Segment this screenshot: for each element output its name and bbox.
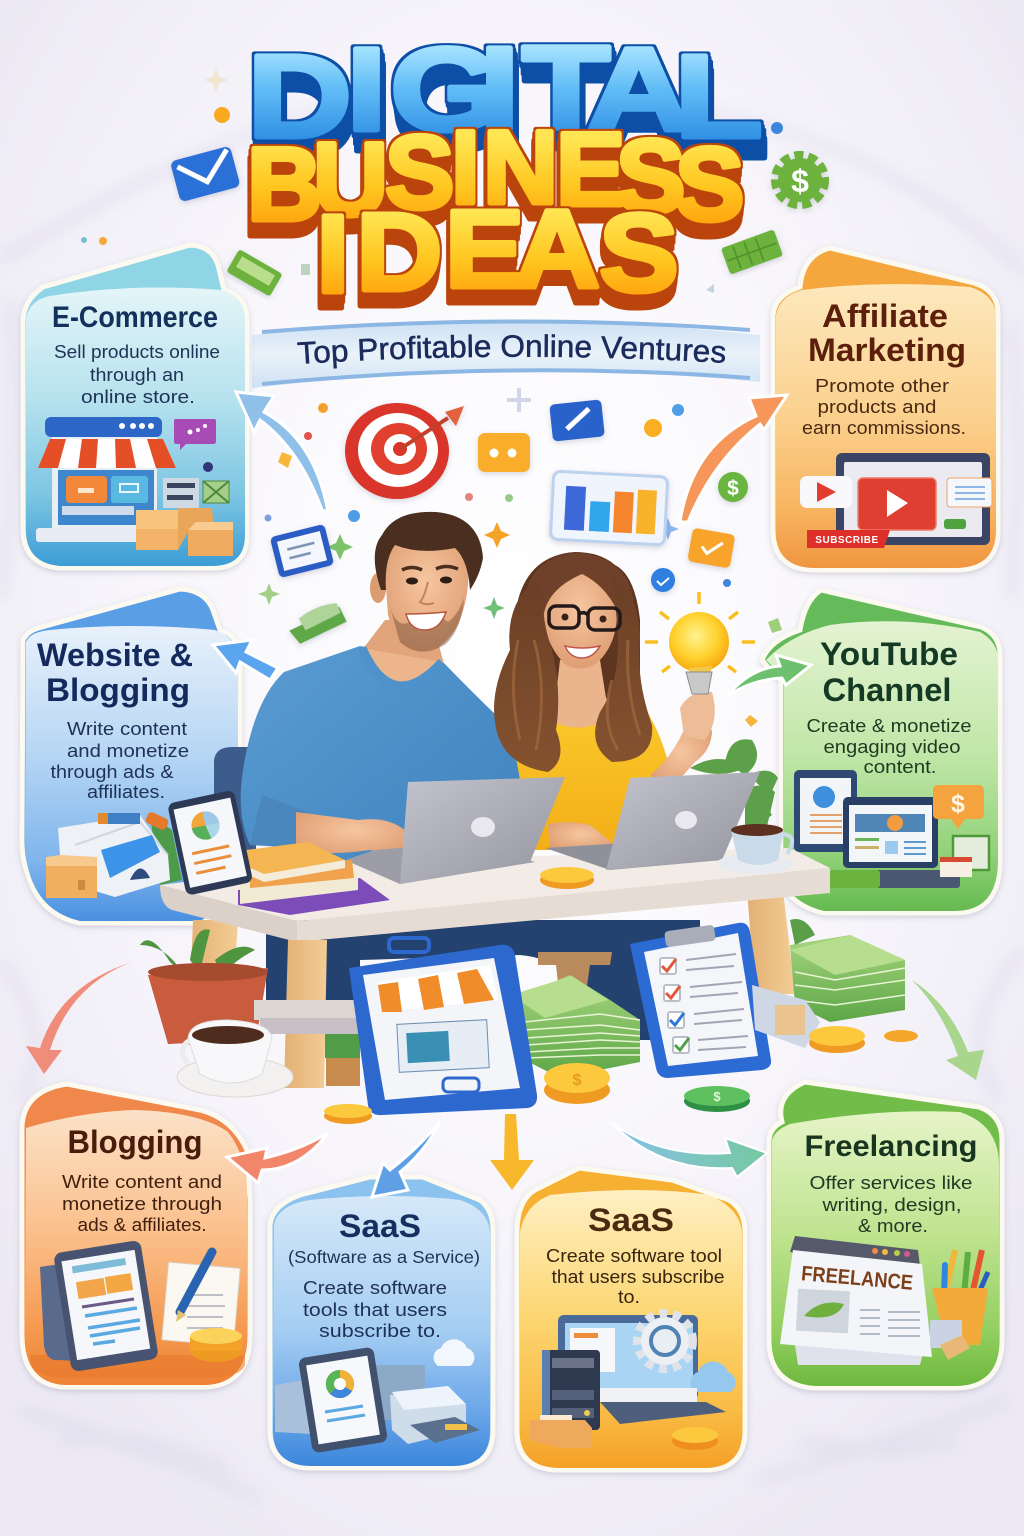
SaaS description: subscribe to. bbox=[319, 1320, 441, 1341]
arrow: to Blogging bbox=[26, 962, 132, 1074]
illustration: man bbox=[214, 512, 524, 880]
SaaS description bbox=[546, 1246, 724, 1307]
Affiliate description bbox=[802, 375, 966, 438]
woman arm and hand bbox=[650, 728, 712, 790]
card front shape bbox=[776, 284, 996, 568]
SaaS description: that users subscribe bbox=[552, 1267, 724, 1287]
SaaS description bbox=[303, 1277, 447, 1341]
cash stack center bbox=[511, 975, 640, 1078]
Freelancing description: writing, design, bbox=[821, 1194, 962, 1215]
stool bbox=[538, 952, 612, 1000]
chair bbox=[214, 747, 256, 850]
man and woman legs bbox=[266, 920, 700, 1040]
arrow: to SaaS tool bbox=[490, 1114, 534, 1190]
man collar bbox=[362, 648, 442, 686]
floating icon: cash right bbox=[721, 229, 783, 275]
Freelancing description bbox=[810, 1172, 972, 1236]
card back shape bbox=[23, 245, 247, 568]
YouTube Channel heading: YouTube bbox=[820, 636, 958, 672]
Blogging description bbox=[62, 1171, 222, 1235]
card back shape bbox=[769, 1082, 1002, 1388]
tablet storefront bbox=[349, 938, 537, 1115]
decorative dots bbox=[81, 68, 783, 727]
subscribe label: SUBSCRIBE bbox=[815, 535, 879, 546]
man nose bbox=[420, 582, 434, 604]
card front shape bbox=[766, 621, 998, 911]
E-Commerce description: through an bbox=[90, 364, 184, 385]
icon: orange chip bbox=[478, 433, 530, 472]
coins and green token: $ bbox=[573, 1072, 582, 1089]
YouTube description bbox=[806, 716, 972, 777]
arrow: to Website bbox=[213, 640, 278, 680]
arrow: to Freelancing bottom bbox=[612, 1123, 767, 1177]
woman smile bbox=[565, 646, 600, 658]
desk top bbox=[160, 848, 830, 921]
books under desk bbox=[254, 1000, 360, 1086]
Blogging description: Write content and bbox=[62, 1171, 222, 1192]
icon: green dollar: $ bbox=[727, 477, 739, 500]
man hair bbox=[375, 512, 483, 590]
card back shape bbox=[22, 1084, 250, 1387]
Website description: through ads & bbox=[50, 762, 174, 782]
arrow: to YouTube bbox=[726, 655, 811, 697]
SaaS description: Create software tool bbox=[546, 1246, 722, 1266]
arrow: to Freelancing bbox=[912, 980, 984, 1080]
woman glasses bbox=[549, 606, 620, 630]
Freelancing description: Offer services like bbox=[810, 1172, 972, 1193]
icon: shipping and printer bbox=[46, 811, 182, 898]
Affiliate description: Promote other bbox=[815, 375, 949, 396]
Freelancing description: & more. bbox=[858, 1215, 928, 1236]
clipboard checklist bbox=[630, 923, 771, 1078]
coffee cup right bbox=[716, 824, 792, 874]
title line: DIGITAL: DIGITAL bbox=[248, 21, 763, 162]
E-Commerce description: online store. bbox=[81, 386, 195, 407]
panel: E-Commerce bbox=[23, 245, 247, 568]
desk side bbox=[160, 885, 297, 942]
floating icon: dollar gear: $ bbox=[791, 163, 809, 199]
book stack bbox=[238, 842, 390, 915]
title: Digital Business Ideas bbox=[247, 21, 763, 316]
desk leg back left bbox=[188, 920, 238, 1045]
icon: channel devices bbox=[794, 770, 989, 888]
woman hair back bbox=[510, 552, 640, 700]
coins and green token: $ bbox=[713, 1089, 721, 1104]
card back shape bbox=[22, 589, 240, 923]
Affiliate description: earn commissions. bbox=[802, 417, 966, 438]
arrow: to E-Commerce bbox=[236, 392, 328, 512]
light bulb bbox=[645, 592, 755, 694]
coffee cup left bbox=[177, 1020, 293, 1097]
cash stack right bbox=[790, 919, 905, 1022]
woman neck and chest bbox=[538, 660, 622, 728]
E-Commerce description: Sell products online bbox=[54, 341, 220, 362]
Affiliate Marketing heading: Affiliate bbox=[822, 298, 948, 334]
illustration: woman bbox=[494, 552, 755, 852]
Website & Blogging heading bbox=[37, 637, 193, 708]
arrow: to lower Blogging bbox=[227, 1133, 328, 1183]
plant behind laptop bbox=[690, 739, 778, 835]
woman hair left lock bbox=[494, 580, 560, 772]
icon: bar chart bbox=[550, 471, 668, 545]
stapler bbox=[752, 985, 820, 1048]
card front shape bbox=[273, 1196, 490, 1466]
Website description: and monetize bbox=[67, 741, 189, 761]
card back shape bbox=[517, 1168, 745, 1470]
E-Commerce heading: E-Commerce bbox=[52, 301, 218, 334]
Website description: Write content bbox=[67, 719, 187, 739]
panel: Freelancing bbox=[769, 1082, 1002, 1388]
icon: channel devices: $ bbox=[951, 790, 965, 818]
Blogging heading: Blogging bbox=[68, 1124, 202, 1160]
card back shape bbox=[762, 590, 1000, 913]
card front shape bbox=[26, 288, 245, 566]
floating icon: dollar gear bbox=[775, 155, 825, 205]
card back shape bbox=[270, 1177, 493, 1468]
Affiliate Marketing heading: Marketing bbox=[808, 332, 966, 368]
SaaS subtitle: (Software as a Service) bbox=[288, 1247, 480, 1267]
Freelancing heading: Freelancing bbox=[804, 1130, 978, 1163]
arrow: to Affiliate Marketing bbox=[680, 395, 787, 522]
man beard bbox=[388, 598, 464, 652]
woman hair highlights bbox=[513, 640, 640, 750]
woman hair crown bbox=[525, 553, 634, 620]
panel: Website & Blogging bbox=[22, 589, 240, 923]
gold coin on desk bbox=[540, 867, 594, 889]
SaaS heading: SaaS bbox=[588, 1202, 674, 1238]
man smile bbox=[406, 612, 446, 630]
Affiliate Marketing heading bbox=[808, 298, 966, 368]
Website description bbox=[50, 719, 189, 802]
man sweater bbox=[241, 646, 524, 880]
man forearm and hand bbox=[296, 812, 412, 858]
man eyes bbox=[406, 576, 452, 584]
potted plant bbox=[140, 929, 268, 1044]
YouTube description: Create & monetize bbox=[806, 716, 972, 736]
Blogging description: ads & affiliates. bbox=[78, 1214, 206, 1235]
desk leg back right bbox=[747, 890, 795, 994]
icon: video marketing bbox=[800, 453, 992, 548]
Affiliate description: products and bbox=[818, 396, 936, 417]
icon: freelance page and pencil cup bbox=[780, 1236, 988, 1365]
woman face bbox=[542, 568, 617, 669]
YouTube description: content. bbox=[864, 757, 936, 777]
icon: cash bundle bbox=[286, 601, 349, 645]
Website & Blogging heading: Blogging bbox=[46, 672, 190, 708]
man face bbox=[384, 535, 468, 652]
Blogging description: monetize through bbox=[62, 1193, 222, 1214]
card front shape bbox=[25, 1110, 247, 1385]
panel: SaaS (Software as a Service) bbox=[270, 1177, 493, 1468]
desk leg front left bbox=[284, 940, 327, 1088]
card front shape bbox=[772, 1111, 999, 1386]
icon: server laptop gear bbox=[530, 1313, 736, 1450]
SaaS heading: SaaS bbox=[339, 1208, 421, 1244]
icon: target and dart bbox=[345, 403, 464, 499]
card front shape bbox=[520, 1190, 742, 1468]
tablet with pie chart bbox=[167, 790, 253, 896]
freelance page label: FREELANCE bbox=[800, 1262, 914, 1295]
panel: YouTube Channel bbox=[762, 590, 1000, 913]
laptop: right bbox=[545, 772, 760, 870]
panel: SaaS software tool bbox=[517, 1168, 745, 1470]
desk bbox=[160, 848, 830, 1088]
icon: blue tool chip bbox=[549, 399, 605, 442]
icon: tablet and printer bbox=[275, 1339, 480, 1453]
icon: note card bbox=[270, 524, 334, 578]
man ear bbox=[370, 573, 386, 603]
laptop: left bbox=[345, 777, 565, 884]
icon: orange check chip bbox=[687, 528, 735, 569]
icon: green dollar bbox=[718, 472, 748, 502]
SaaS description: tools that users bbox=[303, 1299, 447, 1320]
E-Commerce description bbox=[54, 341, 220, 407]
title line: IDEAS: IDEAS bbox=[316, 188, 679, 316]
SaaS description: to. bbox=[618, 1287, 640, 1307]
SaaS description: Create software bbox=[303, 1277, 447, 1298]
woman hair right lock bbox=[595, 575, 652, 762]
Website description: affiliates. bbox=[87, 782, 165, 802]
YouTube Channel heading bbox=[820, 636, 958, 708]
YouTube description: engaging video bbox=[824, 737, 960, 757]
arrow: to SaaS bbox=[372, 1122, 440, 1197]
Website & Blogging heading: Website & bbox=[37, 637, 193, 673]
woman typing hand bbox=[548, 822, 615, 852]
icon: online store bbox=[36, 417, 233, 556]
floating icon: cash left bbox=[226, 249, 283, 297]
panel: Blogging bbox=[22, 1084, 250, 1387]
woman yellow top bbox=[495, 695, 668, 850]
man cuff bbox=[250, 795, 308, 848]
floating icon: mail check bbox=[170, 146, 241, 202]
YouTube Channel heading: Channel bbox=[822, 672, 952, 708]
card front shape bbox=[25, 626, 238, 921]
card back shape bbox=[773, 248, 998, 570]
subtitle banner bbox=[252, 320, 760, 388]
icon: blog tablet and notes bbox=[30, 1240, 245, 1378]
icon: blue check dot bbox=[651, 568, 675, 592]
subtitle text: Top Profitable Online Ventures bbox=[297, 334, 726, 369]
panel: Affiliate Marketing bbox=[773, 248, 998, 570]
desk front bbox=[297, 868, 830, 942]
man neck bbox=[362, 620, 444, 664]
title line: BUSINESS: BUSINESS bbox=[247, 110, 744, 243]
coins and green token bbox=[324, 1026, 918, 1124]
